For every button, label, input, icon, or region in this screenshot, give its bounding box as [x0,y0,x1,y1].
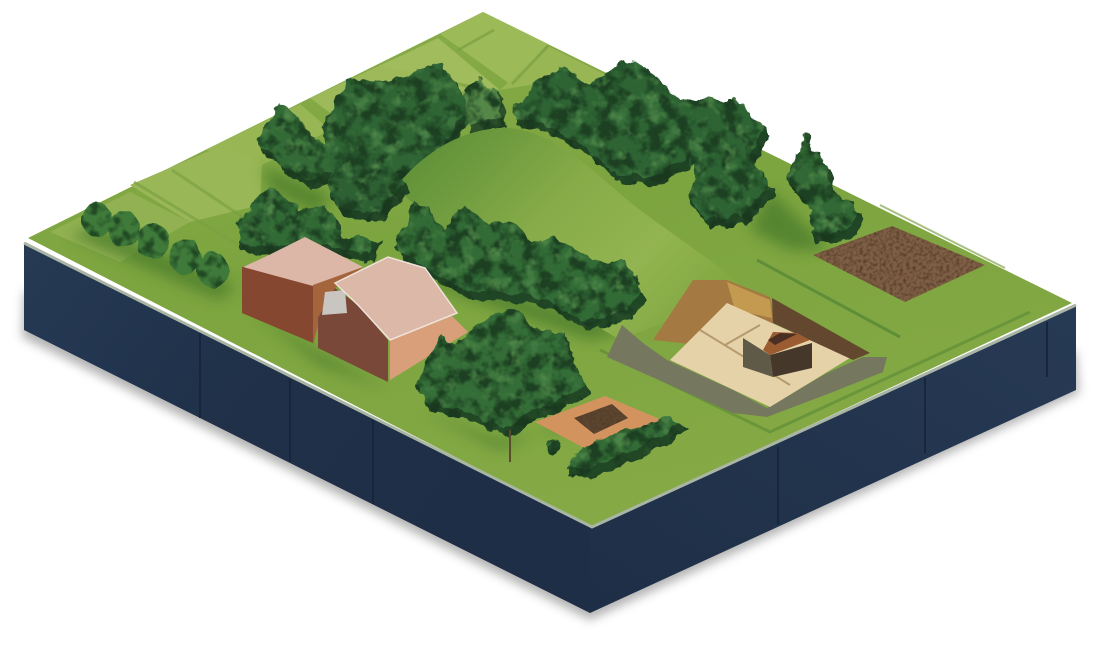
orange garden patch [535,396,662,451]
tree row: small trees at left [82,203,229,288]
barn: left building [242,237,363,343]
excavation: central block [743,332,812,377]
excavation: outer front wall [607,325,887,417]
forest: back of hill [258,60,775,228]
barn: gap between buildings [313,267,363,345]
forest: left of hill [238,145,408,262]
excavation: floor [670,303,850,407]
central tree group [415,308,590,462]
hedge bushes [546,418,690,478]
forest shadows on grass [70,165,830,450]
excavation: plank seams [700,325,790,385]
forest: front of hill [392,200,648,332]
excavation: dark spoil heap [772,298,870,360]
top surface: grass [24,12,1076,527]
barn: right building [318,257,468,382]
excavation: back wall [653,280,775,345]
excavation site [607,280,887,417]
base: left side wall [24,243,590,613]
brown crop field [813,226,985,302]
hill [395,128,745,340]
base: right side wall [590,305,1076,613]
forest: lone trees at right [788,135,862,245]
field strips [50,12,1030,432]
block shadow [22,290,1079,620]
